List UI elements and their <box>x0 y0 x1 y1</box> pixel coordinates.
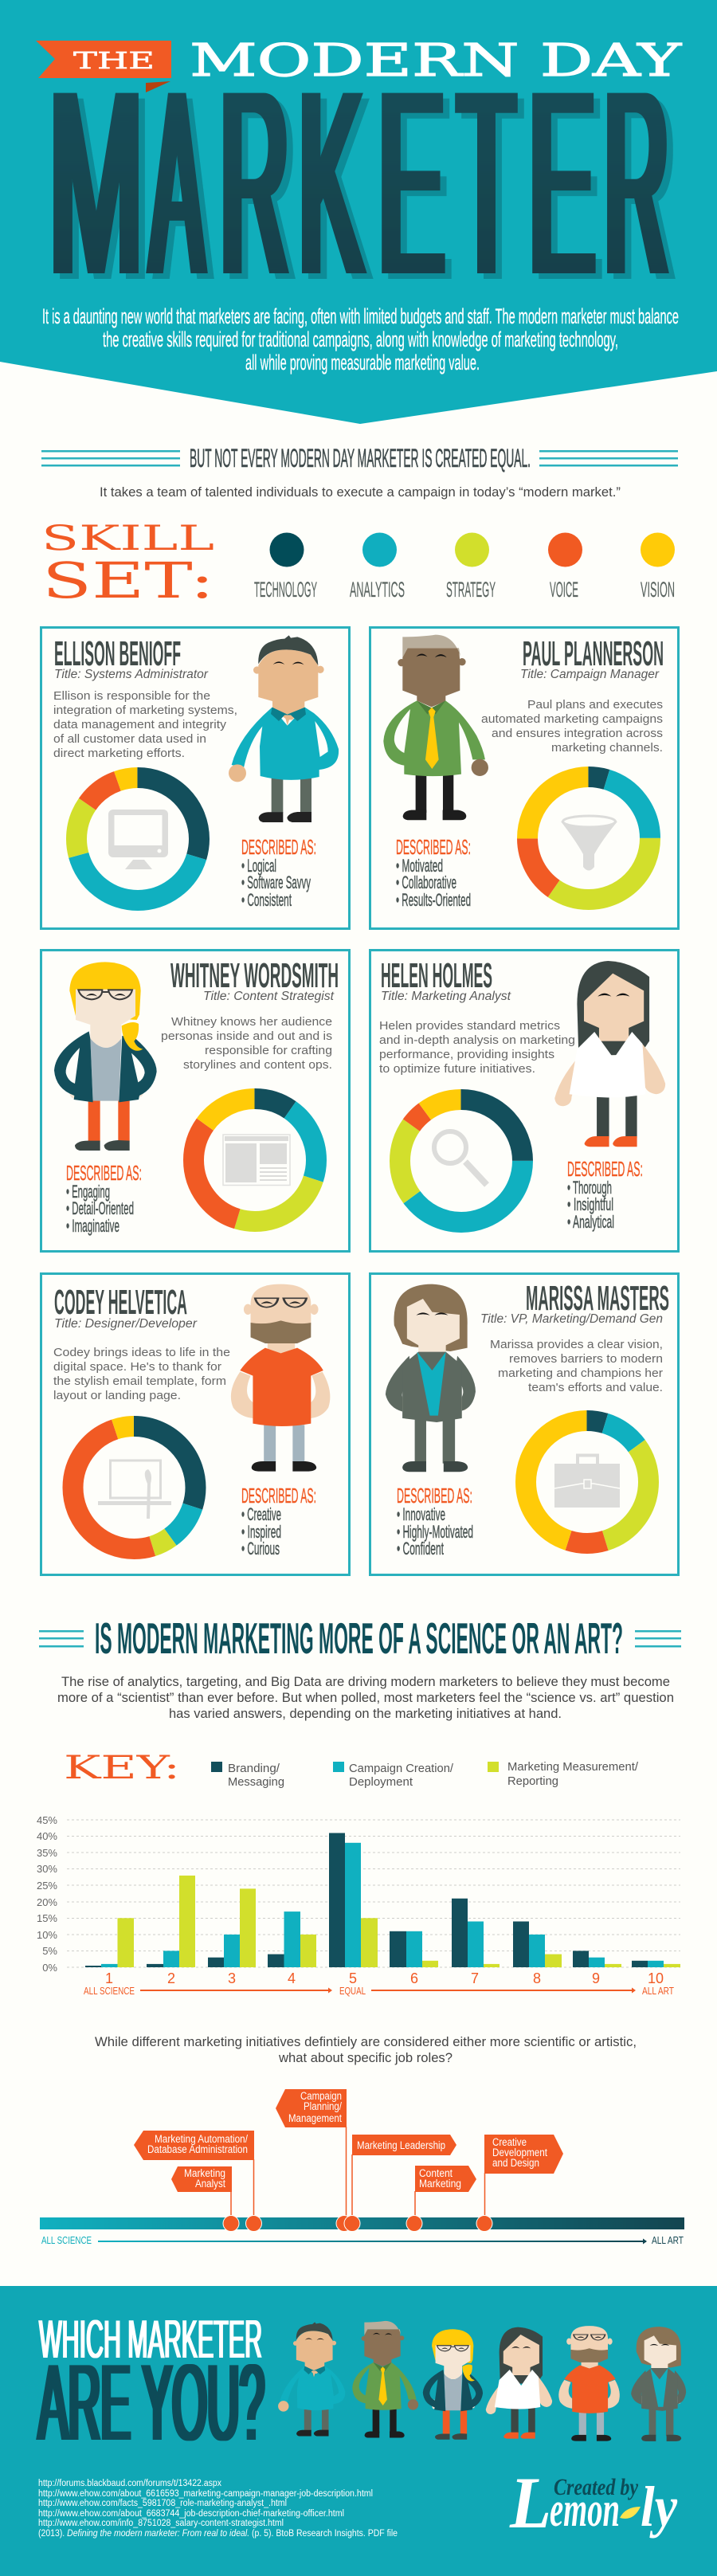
job title: Title: Designer/Developer <box>54 1317 198 1331</box>
description: team's efforts and value. <box>528 1381 663 1394</box>
description <box>53 1346 230 1402</box>
bar chart: 1 <box>105 1970 113 1986</box>
description: Codey brings ideas to life in the <box>53 1346 230 1359</box>
panel: codey helvetica: DESCRIBED AS: <box>241 1484 316 1508</box>
described as <box>567 1157 643 1232</box>
bar chart: 15% <box>37 1912 57 1924</box>
flag: creative development: Creative <box>492 2136 527 2148</box>
description <box>490 1338 663 1394</box>
panel: whitney wordsmith <box>41 950 349 1251</box>
character: marissa <box>386 1284 476 1472</box>
described as: • Insightful <box>567 1194 613 1214</box>
description: and ensures integration across <box>492 727 663 740</box>
skill set heading <box>41 519 214 610</box>
header banner <box>0 0 717 424</box>
character: paul <box>383 635 488 820</box>
description <box>379 1019 575 1076</box>
job title: Title: Systems Administrator <box>54 668 209 681</box>
title: marketer: R <box>220 36 288 329</box>
logo: created by lemonly: ly <box>641 2475 678 2539</box>
title: marketer: T <box>457 36 515 329</box>
donut chart <box>194 1099 316 1221</box>
title: marketer: K <box>299 36 363 329</box>
sources: http://www.ehow.com/about_6683744_job-description-chief-marketing-officer.html <box>38 2509 344 2519</box>
title: modern day: MODERN DAY <box>190 35 683 87</box>
character: whitney <box>54 962 157 1151</box>
described as: • Logical <box>241 856 276 876</box>
character lineup <box>278 2321 686 2441</box>
bar chart <box>37 1814 680 1986</box>
described as <box>241 1484 316 1559</box>
description: Marissa provides a clear vision, <box>490 1338 663 1351</box>
skill set heading: SKILL <box>41 519 214 559</box>
intro text: all while proving measurable marketing value. <box>245 351 480 374</box>
flag: creative development: Development <box>492 2147 547 2158</box>
flag: campaign planning: Management <box>288 2112 342 2124</box>
bar chart: 7 <box>471 1970 479 1986</box>
described as: • Analytical <box>567 1212 614 1232</box>
science paragraph: The rise of analytics, targeting, and Big Data are driving modern marketers to believe they must become <box>61 1675 670 1689</box>
described as: • Innovative <box>397 1504 445 1524</box>
flag: campaign planning: Planning/ <box>304 2100 342 2112</box>
title: marketer: M <box>49 36 143 329</box>
icon: newspaper <box>223 1135 290 1186</box>
footer panel: WHICH MARKETER <box>39 2309 262 2370</box>
described as <box>397 1484 473 1559</box>
description <box>53 689 237 760</box>
description: direct marketing efforts. <box>53 747 185 760</box>
donut chart <box>527 777 650 900</box>
panel: codey helvetica <box>41 1273 349 1574</box>
description: to optimize future initiatives. <box>379 1062 535 1076</box>
title: marketer: E <box>529 36 595 329</box>
icon: magnifier <box>434 1131 487 1185</box>
bar chart: 0% <box>42 1962 57 1974</box>
flag: marketing analyst <box>171 2166 232 2192</box>
described as: • Confident <box>397 1539 444 1559</box>
panel: paul plannerson <box>370 628 679 929</box>
flag: campaign planning <box>276 2089 347 2127</box>
description: marketing channels. <box>551 741 663 755</box>
bar chart: 8 <box>533 1970 541 1986</box>
bar chart: 35% <box>37 1847 57 1859</box>
bar chart: 2 <box>167 1970 175 1986</box>
description <box>161 1015 332 1072</box>
chart axis scale: ALL ART <box>642 1985 674 1997</box>
donut chart <box>400 1100 523 1222</box>
title: marketer: R <box>226 41 295 335</box>
title: marketer: T <box>464 41 521 335</box>
title: marketer: A <box>151 36 203 329</box>
flag: marketing leadership: Marketing Leadership <box>357 2139 445 2151</box>
description: storylines and content ops. <box>183 1058 332 1072</box>
icon: briefcase <box>554 1455 620 1508</box>
chart legend: Branding/ <box>228 1762 280 1775</box>
panel: helen holmes <box>370 950 679 1251</box>
bar chart: 9 <box>592 1970 600 1986</box>
icon: monitor <box>108 810 168 869</box>
chart legend: Messaging <box>228 1776 284 1789</box>
flag: campaign planning: Campaign <box>300 2090 342 2102</box>
text: WHITNEY WORDSMITH <box>170 956 339 995</box>
described as <box>66 1161 142 1236</box>
flag: marketing automation <box>134 2131 254 2160</box>
described as: • Software Savvy <box>241 872 311 892</box>
description: Helen provides standard metrics <box>379 1019 560 1033</box>
chart legend: Campaign Creation/ <box>349 1762 454 1775</box>
described as: • Consistent <box>241 890 292 910</box>
character: codey <box>231 1284 330 1472</box>
flag: creative development: and Design <box>492 2157 539 2169</box>
flag: marketing automation: Marketing Automation/ <box>155 2133 248 2145</box>
chart legend: Deployment <box>349 1776 413 1789</box>
described as: • Engaging <box>66 1182 110 1202</box>
logo: created by lemonly: Created by <box>554 2474 639 2500</box>
flag: marketing leadership <box>352 2135 456 2155</box>
science paragraph <box>57 1675 674 1721</box>
bar chart: 30% <box>37 1863 57 1875</box>
description: marketing and champions her <box>498 1366 663 1380</box>
chart axis scale: ALL SCIENCE <box>84 1985 135 1997</box>
description: personas inside and out and is <box>161 1029 332 1043</box>
job title: Title: Marketing Analyst <box>381 990 511 1003</box>
description: automated marketing campaigns <box>481 712 663 726</box>
panel: whitney wordsmith: DESCRIBED AS: <box>66 1161 142 1185</box>
panel: paul plannerson: DESCRIBED AS: <box>396 835 471 859</box>
described as: • Motivated <box>396 856 443 876</box>
description: Ellison is responsible for the <box>53 689 210 703</box>
bar chart: 45% <box>37 1814 57 1826</box>
title: marketer: E <box>535 41 601 335</box>
title: marketer: E <box>385 41 451 335</box>
panel: codey helvetica: CODEY HELVETICA <box>54 1283 187 1322</box>
icon: laptop and brush <box>98 1461 171 1519</box>
description: of all customer data used in <box>53 732 206 746</box>
described as: • Collaborative <box>396 872 456 892</box>
description: integration of marketing systems, <box>53 704 237 717</box>
job roles question <box>95 2034 637 2065</box>
scale axis: ALL ART <box>652 2234 684 2246</box>
sources: http://www.ehow.com/about_6616593_marketing-campaign-manager-job-description.html <box>38 2489 373 2499</box>
described as: • Detail-Oriented <box>66 1198 134 1218</box>
panel: ellison benioff: DESCRIBED AS: <box>241 835 316 859</box>
description: digital space. He's to thank for <box>53 1360 221 1374</box>
science paragraph: more of a “scientist” than ever before. But when polled, most marketers feel the “science vs. art” question <box>57 1691 674 1705</box>
ribbon: the <box>36 41 171 92</box>
icon: funnel <box>561 816 617 870</box>
bar chart: 10% <box>37 1929 57 1941</box>
panel: marissa masters: DESCRIBED AS: <box>397 1484 472 1508</box>
title: marketer <box>49 36 675 335</box>
description: layout or landing page. <box>53 1389 181 1402</box>
job role scale <box>40 2089 684 2246</box>
footer panel: ARE YOU? <box>38 2342 264 2463</box>
flag: content marketing <box>415 2166 476 2192</box>
described as: • Creative <box>241 1504 281 1524</box>
character: ellison <box>229 635 339 822</box>
sources: http://forums.blackbaud.com/forums/t/13422.aspx <box>38 2479 221 2488</box>
logo: created by lemonly: L <box>509 2462 551 2543</box>
job title: Title: Campaign Manager <box>520 668 660 681</box>
bar chart: 6 <box>410 1970 418 1986</box>
title: marketer: M <box>56 41 150 335</box>
flag: content marketing: Marketing <box>419 2178 461 2190</box>
description: performance, providing insights <box>379 1048 554 1061</box>
bar chart: 25% <box>37 1880 57 1892</box>
bar chart: 40% <box>37 1830 57 1842</box>
described as: • Curious <box>241 1539 280 1559</box>
logo: created by lemonly <box>509 2462 678 2543</box>
logo: created by lemonly: emon <box>550 2483 620 2537</box>
described as <box>396 835 471 910</box>
described as: • Imaginative <box>66 1216 120 1236</box>
intro text <box>42 304 679 374</box>
chart axis scale: EQUAL <box>339 1985 366 1997</box>
skill legend: TECHNOLOGY <box>254 578 317 602</box>
text: VISION <box>641 578 675 602</box>
scale axis: ALL SCIENCE <box>41 2234 92 2246</box>
skill legend: ANALYTICS <box>350 578 405 602</box>
skill set heading: SET: <box>42 551 214 610</box>
panel: marissa masters <box>370 1273 679 1574</box>
flag: marketing analyst: Marketing <box>184 2167 225 2179</box>
flag: creative development <box>484 2135 563 2174</box>
described as: • Thorough <box>567 1178 612 1198</box>
bar chart: 5% <box>42 1945 57 1957</box>
donut chart <box>526 1421 648 1543</box>
job roles question: While different marketing initiatives defintiely are considered either more scientific or artistic, <box>95 2034 637 2049</box>
job roles question: what about specific job roles? <box>278 2050 453 2065</box>
chart legend: Marketing Measurement/ <box>507 1761 639 1774</box>
flag: marketing automation: Database Administration <box>147 2143 248 2155</box>
bar chart: 10 <box>648 1970 664 1986</box>
skill legend: VOICE <box>550 578 578 602</box>
subtitle: It takes a team of talented individuals to execute a campaign in today’s “modern market.” <box>100 485 621 500</box>
chart legend <box>211 1761 639 1789</box>
chart legend: Reporting <box>507 1775 558 1788</box>
skill legend <box>254 532 675 602</box>
footer panel <box>0 2286 717 2576</box>
sources: (2013). Defining the modern marketer: From real to ideal. (p. 5). BtoB Research Insights. PDF file <box>38 2529 398 2539</box>
donut chart <box>76 778 199 900</box>
panel: helen holmes: HELEN HOLMES <box>381 956 492 995</box>
ribbon: the: THE <box>73 47 155 74</box>
skill legend: STRATEGY <box>446 578 496 602</box>
panel: ellison benioff <box>41 628 349 929</box>
description: the stylish email template, form <box>53 1374 226 1388</box>
job title: Title: Content Strategist <box>203 990 335 1003</box>
description: removes barriers to modern <box>509 1352 663 1366</box>
bar chart: 5 <box>349 1970 357 1986</box>
title: marketer: A <box>157 41 210 335</box>
flag: content marketing: Content <box>419 2167 453 2179</box>
key heading: KEY: <box>64 1750 180 1786</box>
description: Paul plans and executes <box>527 698 663 712</box>
scale axis <box>41 2234 684 2246</box>
described as <box>241 835 316 910</box>
sources <box>38 2479 398 2539</box>
description: and in-depth analysis on marketing <box>379 1033 575 1047</box>
bar chart: 3 <box>228 1970 236 1986</box>
science paragraph: has varied answers, depending on the marketing initiatives at hand. <box>169 1707 562 1721</box>
description: data management and integrity <box>53 718 227 731</box>
description: responsible for crafting <box>205 1044 332 1057</box>
described as: • Highly-Motivated <box>397 1522 473 1542</box>
donut chart <box>73 1426 196 1549</box>
bar chart: 4 <box>288 1970 296 1986</box>
sources: http://www.ehow.com/info_8751028_salary-content-strategist.html <box>38 2519 284 2528</box>
character: helen <box>554 961 665 1147</box>
sources: http://www.ehow.com/facts_5981708_role-marketing-analyst_.html <box>38 2499 287 2508</box>
job title: Title: VP, Marketing/Demand Gen <box>480 1312 663 1326</box>
described as: • Inspired <box>241 1522 281 1542</box>
description: Whitney knows her audience <box>171 1015 332 1029</box>
chart axis scale <box>84 1985 674 1997</box>
panel: ellison benioff: ELLISON BENIOFF <box>54 634 181 673</box>
described as: • Results-Oriented <box>396 890 471 910</box>
flag: marketing analyst: Analyst <box>195 2178 225 2190</box>
icon: lemon slice <box>620 2507 641 2519</box>
title: marketer: E <box>378 36 445 329</box>
bar chart: 20% <box>37 1896 57 1908</box>
description <box>481 698 663 755</box>
title: marketer: K <box>305 41 370 335</box>
